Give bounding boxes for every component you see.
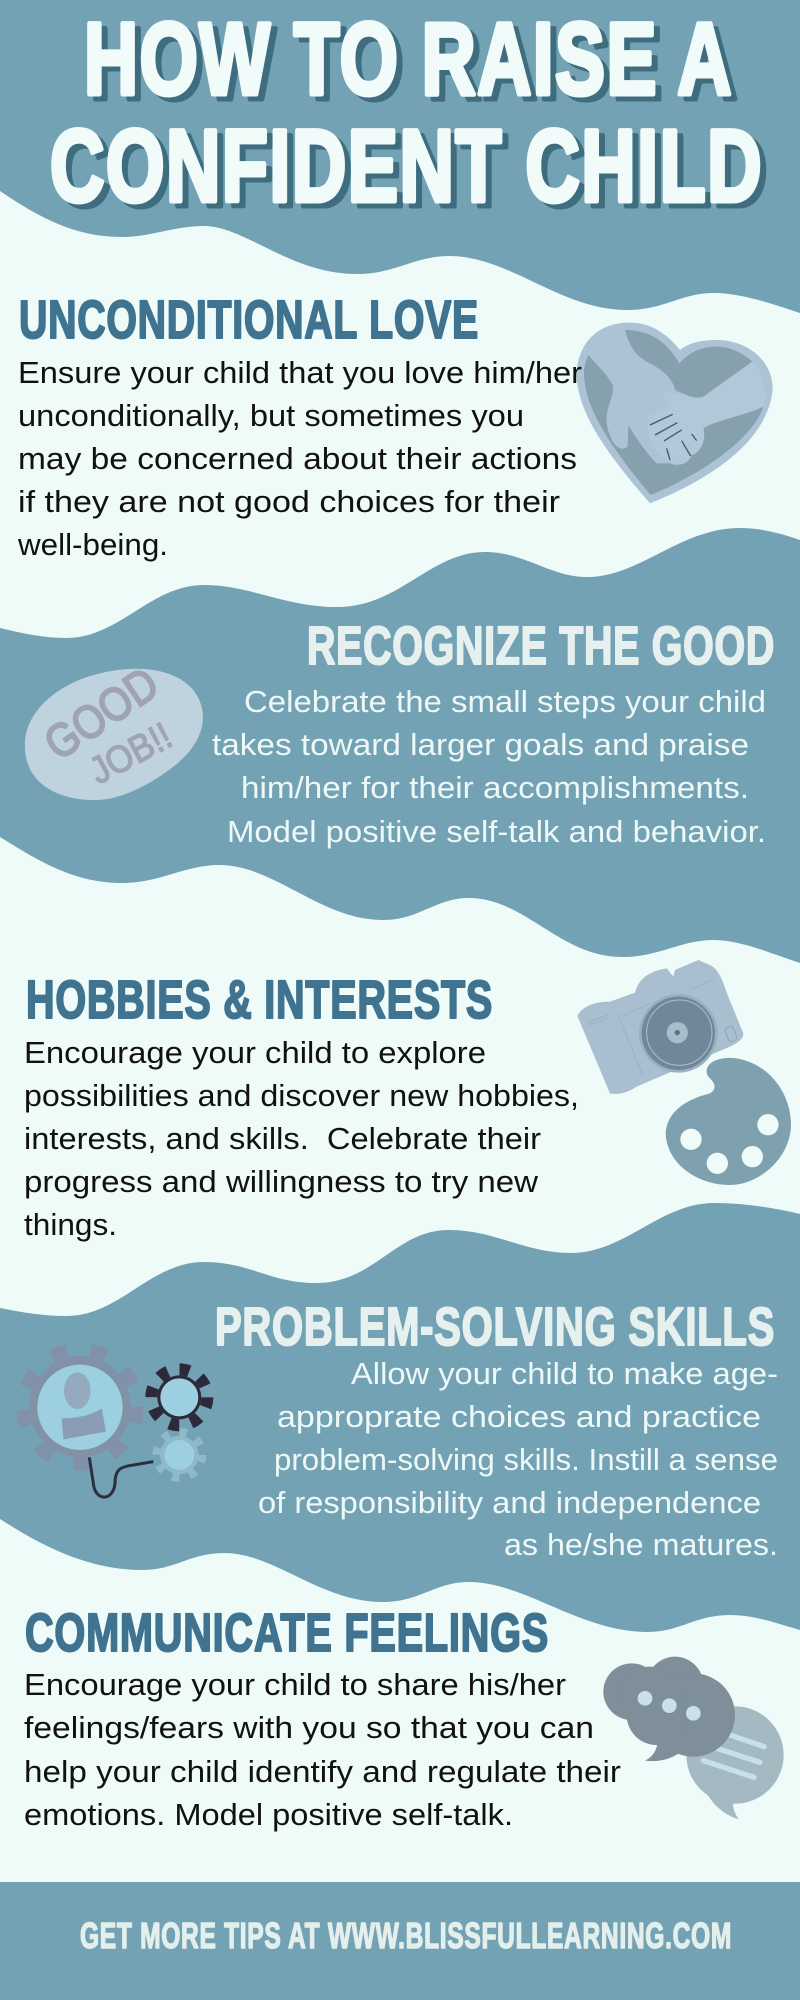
heading: unconditional love: UNCONDITIONAL LOVE — [19, 290, 479, 350]
text block: unconditional love — [17, 355, 582, 562]
text block: hobbies and interests: possibilities and discover new hobbies, — [24, 1078, 579, 1113]
panel: recognize the good band — [0, 528, 800, 963]
text block: unconditional love: unconditionally, but sometimes you — [18, 398, 524, 433]
text block: problem-solving skills: problem-solving skills. Instill a sense — [274, 1442, 778, 1477]
text block: unconditional love: well-being. — [17, 527, 168, 562]
text block: problem-solving skills: of responsibility and independence — [258, 1485, 761, 1520]
heading: communicate feelings: COMMUNICATE FEELINGS — [25, 1603, 549, 1663]
icon: camera — [577, 960, 743, 1094]
heading: hobbies and interests: HOBBIES & INTERESTS — [26, 970, 493, 1030]
text block: recognize the good — [212, 684, 766, 849]
text block: unconditional love: may be concerned about their actions — [18, 441, 577, 476]
text block: recognize the good: him/her for their accomplishments. — [241, 770, 749, 805]
panel: header band — [0, 0, 800, 313]
icon: heart with holding hands — [577, 323, 773, 503]
title — [50, 2, 763, 223]
panel: problem-solving band — [0, 1203, 800, 1632]
icon: chat bubbles — [603, 1657, 784, 1819]
panel: footer band — [0, 1882, 800, 2000]
text block: problem-solving skills — [258, 1356, 778, 1562]
text block: hobbies and interests: Encourage your child to explore — [24, 1035, 486, 1070]
text block: hobbies and interests: interests, and skills. Celebrate their — [24, 1121, 541, 1156]
text block: communicate feelings: help your child identify and regulate their — [24, 1754, 621, 1789]
text block: hobbies and interests: things. — [24, 1207, 117, 1242]
text block: hobbies and interests — [24, 1035, 579, 1242]
text block: problem-solving skills: approprate choices and practice — [277, 1399, 761, 1434]
icon: gears with person — [25, 1351, 207, 1497]
section: hobbies and interests — [24, 970, 579, 1242]
text block: communicate feelings: feelings/fears with you so that you can — [24, 1710, 594, 1745]
section: unconditional love — [17, 290, 582, 562]
text block: recognize the good: takes toward larger goals and praise — [212, 727, 749, 762]
icon: good job bubble: GOOD — [35, 657, 168, 770]
icon: paint palette — [666, 1058, 791, 1185]
text block: unconditional love: Ensure your child that you love him/her — [18, 355, 582, 390]
text block: problem-solving skills: Allow your child to make age- — [351, 1356, 778, 1391]
text block: unconditional love: if they are not good choices for their — [18, 484, 560, 519]
section: communicate feelings — [24, 1603, 621, 1832]
icon: good job bubble: JOB!! — [82, 714, 179, 793]
text block: hobbies and interests: progress and willingness to try new — [24, 1164, 539, 1199]
text block: recognize the good: Celebrate the small steps your child — [244, 684, 766, 719]
text block: problem-solving skills: as he/she matures. — [504, 1527, 778, 1562]
text block: communicate feelings — [24, 1667, 621, 1832]
section: problem-solving skills — [215, 1297, 778, 1562]
text block: communicate feelings: emotions. Model positive self-talk. — [24, 1797, 513, 1832]
icon: good job bubble — [25, 657, 203, 800]
text block: communicate feelings: Encourage your child to share his/her — [24, 1667, 566, 1702]
text block: recognize the good: Model positive self-talk and behavior. — [227, 814, 766, 849]
section: recognize the good — [212, 616, 775, 849]
